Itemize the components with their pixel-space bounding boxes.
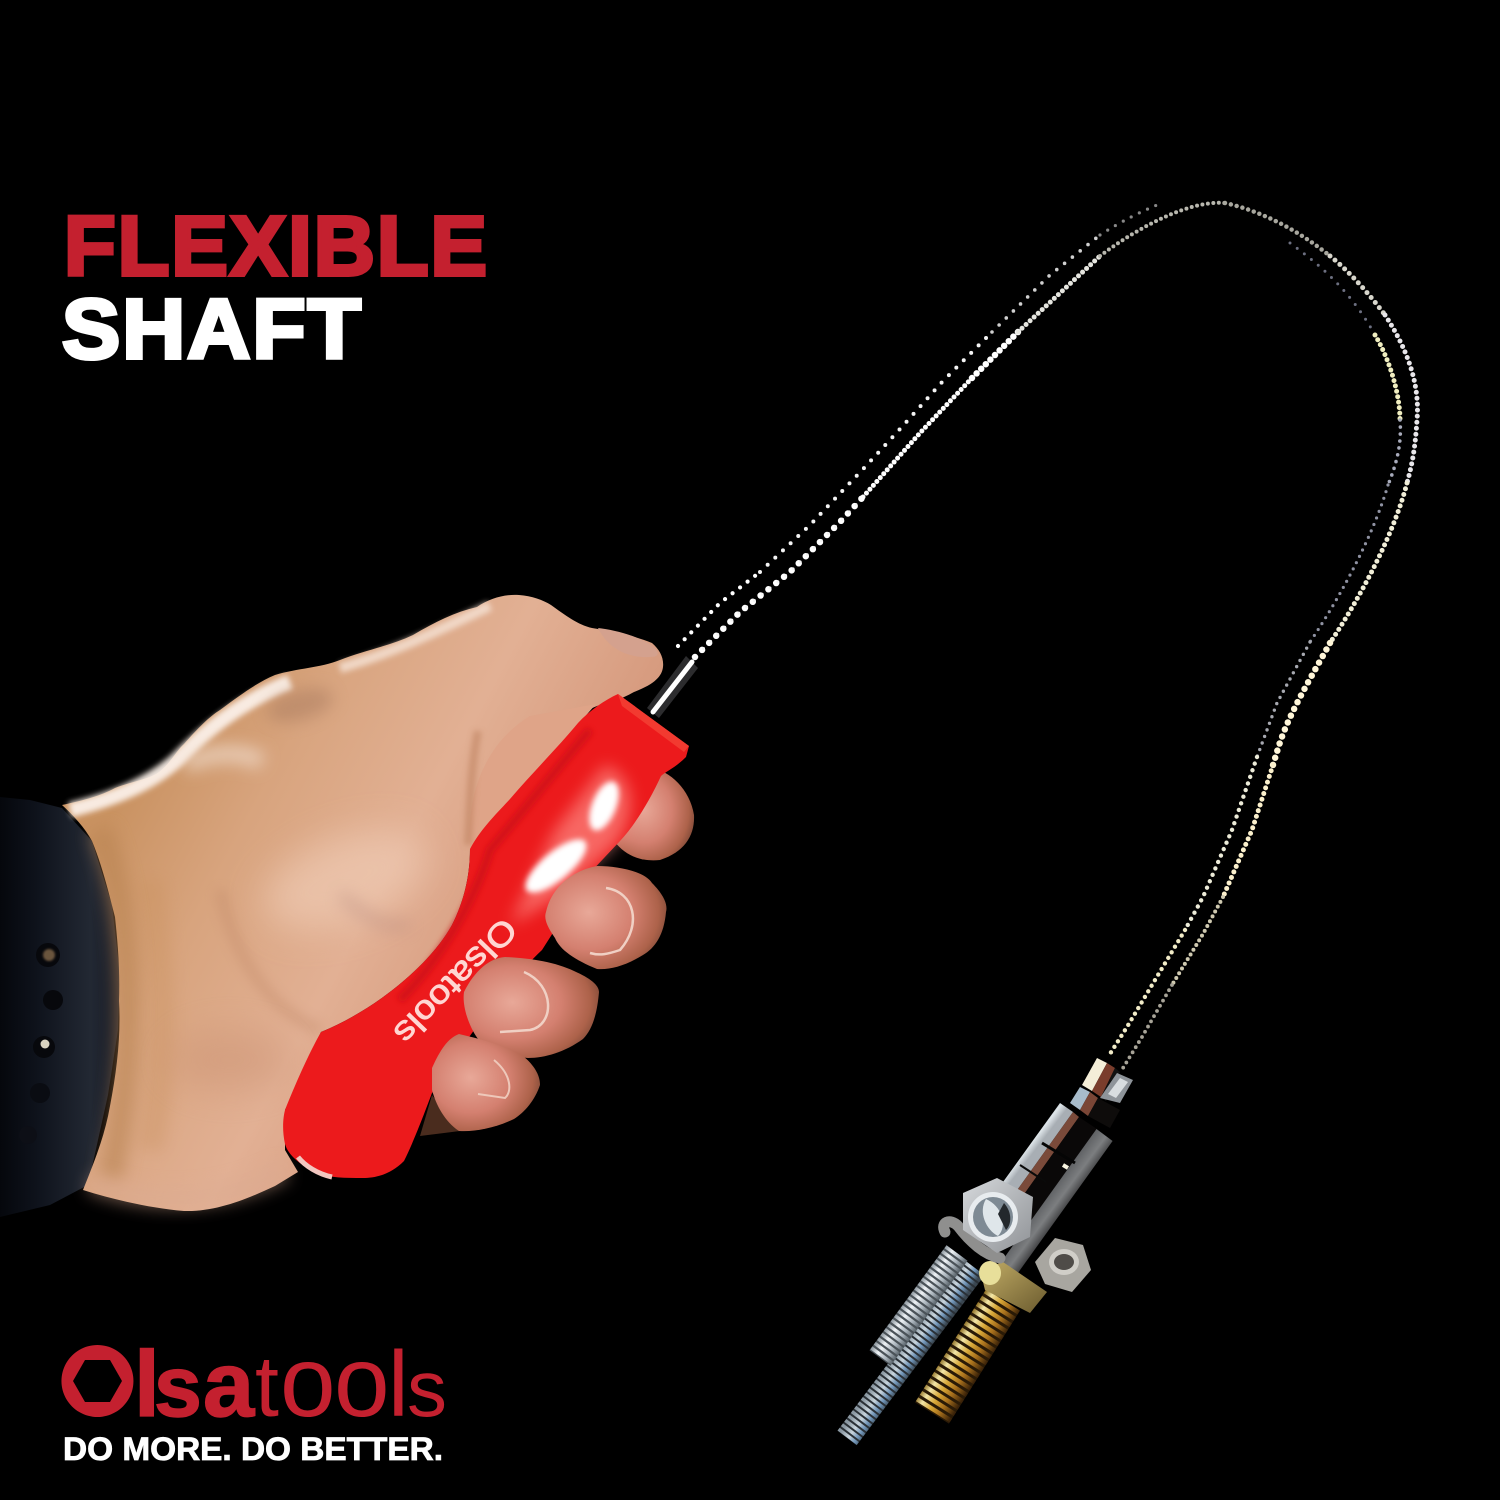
washer ring bbox=[944, 1222, 1000, 1258]
outer strand bbox=[695, 203, 1417, 1068]
logo wordmark: t bbox=[255, 1339, 279, 1435]
ring finger bbox=[464, 957, 599, 1058]
logo: Olsatools bbox=[61, 1326, 447, 1438]
inner palm fold bbox=[468, 704, 596, 850]
logo hex O bbox=[61, 1345, 133, 1417]
palm and back of hand bbox=[62, 595, 663, 1211]
logo wordmark: l bbox=[388, 1332, 409, 1436]
large hex nut bbox=[963, 1178, 1033, 1253]
inner strand bbox=[678, 205, 1400, 1057]
logo wordmark: a bbox=[203, 1334, 255, 1436]
hand with watch strap and handle bbox=[0, 595, 698, 1217]
heading line: SHAFT: SHAFT bbox=[62, 282, 363, 376]
handle darker edge bbox=[400, 730, 590, 1000]
logo wordmark: s bbox=[407, 1344, 447, 1433]
small hex nut bbox=[1035, 1238, 1091, 1292]
index finger bbox=[615, 768, 694, 860]
handle glare bbox=[510, 765, 630, 925]
middle finger bbox=[545, 866, 666, 969]
brass hex head bbox=[979, 1261, 1047, 1313]
magnetic tip holding bolts and nuts bbox=[847, 1058, 1133, 1438]
palm shading bbox=[70, 606, 490, 1198]
tagline: DO MORE. DO BETTER. bbox=[63, 1431, 443, 1467]
brass bolt bbox=[932, 1300, 1003, 1413]
logo wordmark: l bbox=[134, 1332, 160, 1436]
logo wordmark: o bbox=[334, 1326, 390, 1438]
heading line: FLEXIBLE: FLEXIBLE bbox=[64, 199, 489, 293]
logo wordmark: s bbox=[154, 1339, 202, 1435]
upper silver bolt bbox=[880, 1253, 957, 1358]
little finger bbox=[420, 1034, 540, 1136]
tip body bbox=[990, 1058, 1133, 1279]
watch strap bbox=[0, 797, 120, 1217]
shaft rod bbox=[647, 656, 698, 718]
heading: Flexible Shaft bbox=[62, 199, 489, 376]
lower silver bolt bbox=[847, 1268, 975, 1438]
logo wordmark: o bbox=[280, 1326, 336, 1438]
handle logo text: Olsatools bbox=[387, 911, 525, 1052]
red handle bbox=[283, 694, 689, 1178]
thumb nail bbox=[598, 628, 658, 657]
handle collar top face bbox=[618, 694, 689, 752]
flexible shaft: dotted spring coil bbox=[678, 203, 1417, 1068]
